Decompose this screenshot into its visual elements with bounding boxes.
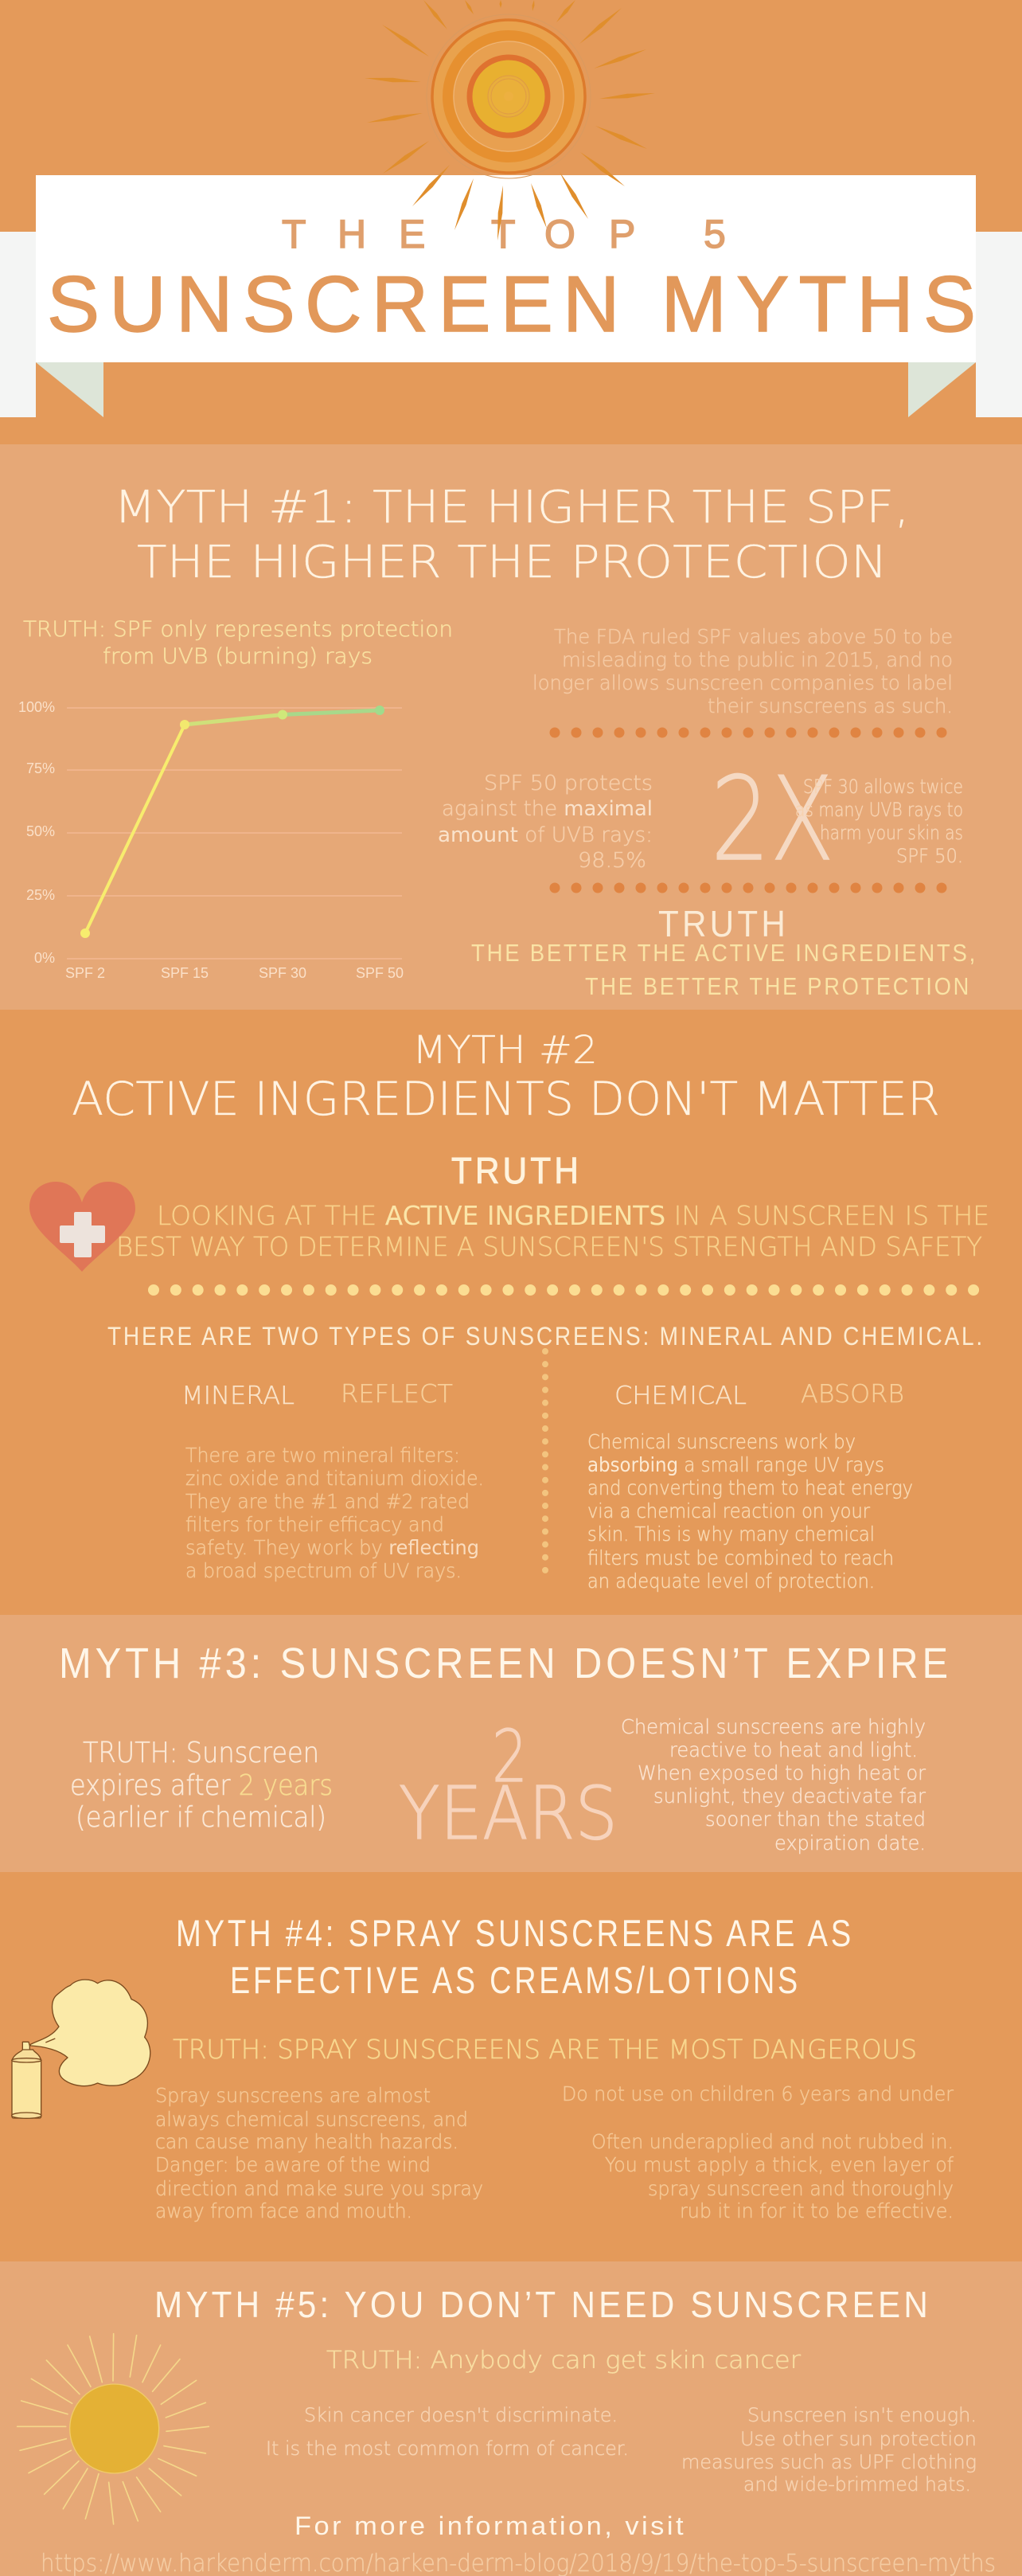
text: mineral column: a broad spectrum of UV rays.	[185, 1559, 462, 1582]
text: sun protection: Sunscreen isn't enough.	[747, 2404, 977, 2426]
heading: myth 3: MYTH #3: SUNSCREEN DOESN’T EXPIRE	[59, 1640, 952, 1687]
line chart: spf protection: SPF 50	[356, 965, 404, 981]
panel: myth 2	[0, 1010, 1022, 1615]
text: skin cancer facts	[266, 2404, 629, 2460]
line chart: spf protection: 75%	[26, 760, 55, 776]
text: spray usage: You must apply a thick, even layer of	[605, 2153, 954, 2176]
text: active ingredients truth: LOOKING AT THE ACTIVE INGREDIENTS IN A SUNSCREEN IS THE	[157, 1200, 989, 1231]
text: spf 30 fact: harm your skin as	[820, 822, 963, 844]
text: chemical column: ABSORB	[801, 1380, 904, 1409]
text: spf 50 fact: amount of UVB rays:	[438, 823, 653, 847]
heading: myth 4	[176, 1912, 854, 2001]
text: better ingredients: THE BETTER THE PROTECTION	[585, 972, 971, 1000]
text: chemical column: filters must be combined to reach	[587, 1546, 894, 1569]
heading: myth 4: MYTH #4: SPRAY SUNSCREENS ARE AS	[176, 1912, 854, 1954]
line chart: spf protection: 100%	[18, 699, 55, 715]
text: spf 30 fact	[795, 776, 963, 867]
line chart: spf protection: 25%	[26, 887, 55, 903]
text: spray hazards: away from face and mouth.	[155, 2199, 412, 2222]
text: sun protection: Use other sun protection	[740, 2428, 977, 2450]
icon: heart with cross	[29, 1182, 135, 1272]
text: truth about skin cancer: TRUTH: Anybody can get skin cancer	[326, 2347, 802, 2375]
text: skin cancer facts: Skin cancer doesn't discriminate.	[304, 2404, 618, 2426]
ribbon: white banner	[36, 175, 976, 362]
stat: 2 years: YEARS	[399, 1771, 618, 1856]
panel: myth 3	[0, 1615, 1022, 1872]
text: chemical column: absorbing a small range UV rays	[587, 1453, 884, 1476]
text: mineral column: filters for their efficacy and	[185, 1513, 444, 1536]
text: spray hazards: Danger: be aware of the wind	[155, 2153, 431, 2176]
text: spray usage: spray sunscreen and thoroughly	[648, 2177, 954, 2200]
line chart: spf protection: SPF 15	[161, 965, 209, 981]
text: fda ruling: misleading to the public in 2015, and no	[562, 648, 953, 671]
text: spray hazards: Spray sunscreens are almost	[155, 2084, 431, 2107]
text: skin cancer facts: It is the most common form of cancer.	[266, 2437, 629, 2460]
text: more information: For more information, visit	[295, 2512, 686, 2540]
text: sun protection: measures such as UPF clothing	[681, 2451, 977, 2473]
text: spf 50 fact: against the maximal	[442, 797, 653, 821]
text: sun protection: and wide-brimmed hats.	[743, 2473, 971, 2496]
panel: myth 5	[0, 2261, 1022, 2576]
text: spray hazards: always chemical sunscreens, and	[155, 2108, 468, 2131]
text: fda ruling: longer allows sunscreen companies to label	[532, 671, 953, 694]
text: chemical column: Chemical sunscreens work by	[587, 1430, 856, 1453]
heading: myth 1: MYTH #1: THE HIGHER THE SPF,	[114, 482, 910, 534]
stat: 2x: 2X	[711, 752, 834, 887]
text: chemical column: via a chemical reaction on your	[587, 1499, 871, 1523]
text: chemical column: skin. This is why many chemical	[587, 1523, 875, 1546]
text: truth about sprays: TRUTH: SPRAY SUNSCREENS ARE THE MOST DANGEROUS	[173, 2034, 917, 2065]
text: active ingredients truth: BEST WAY TO DETERMINE A SUNSCREEN'S STRENGTH AND SAFETY	[116, 1231, 982, 1262]
text: truth about expiry	[70, 1737, 333, 1834]
text: chemical expiry: expiration date.	[774, 1831, 926, 1855]
text: chemical expiry: reactive to heat and light.	[669, 1738, 918, 1761]
title: sunscreen myths: SUNSCREEN MYTHS	[47, 260, 976, 348]
heading: myth 1: THE HIGHER THE PROTECTION	[137, 537, 887, 588]
panel: header	[0, 0, 1022, 444]
text: active ingredients truth	[116, 1200, 989, 1262]
heading: myth 2: MYTH #2	[412, 1028, 598, 1073]
text: mineral column: REFLECT	[341, 1380, 453, 1409]
text: chemical column: an adequate level of protection.	[587, 1569, 875, 1593]
heading: myth 4: EFFECTIVE AS CREAMS/LOTIONS	[230, 1959, 801, 2001]
text: chemical expiry: sooner than the stated	[705, 1808, 926, 1831]
text: spray hazards: can cause many health hazards.	[155, 2130, 458, 2153]
text: truth label: TRUTH	[658, 903, 789, 944]
text: spf 50 fact: 98.5%	[578, 849, 646, 873]
text: better ingredients	[471, 939, 977, 1000]
text: spf 50 fact	[438, 772, 653, 873]
text: chemical expiry: When exposed to high heat or	[638, 1761, 926, 1784]
text: sun protection	[681, 2404, 977, 2496]
line chart: spf protection: 0%	[34, 950, 55, 966]
text: truth about spf: TRUTH: SPF only represents protection	[23, 617, 453, 642]
line chart: spf protection: SPF 2	[65, 965, 105, 981]
text: mineral column: There are two mineral filters:	[185, 1444, 460, 1467]
text: truth about expiry: (earlier if chemical)	[76, 1801, 326, 1834]
text: spray usage: rub it in for it to be effective.	[680, 2199, 954, 2222]
text: mineral column	[181, 1380, 484, 1582]
text: chemical column: CHEMICAL	[614, 1382, 747, 1410]
text: chemical expiry: sunlight, they deactivate far	[653, 1784, 926, 1808]
heading: myth 1	[114, 482, 910, 588]
heading: myth 2	[72, 1028, 940, 1126]
text: spray usage: Often underapplied and not rubbed in.	[591, 2130, 954, 2153]
text: fda ruling: their sunscreens as such.	[708, 694, 953, 717]
text: mineral column: They are the #1 and #2 rated	[185, 1490, 470, 1513]
text: spf 50 fact: SPF 50 protects	[484, 772, 653, 795]
text: chemical expiry	[621, 1715, 926, 1855]
text: truth about expiry: expires after 2 years	[70, 1769, 333, 1802]
text: spray usage: Do not use on children 6 years and under	[562, 2082, 954, 2105]
line chart: spf protection: SPF 30	[259, 965, 306, 981]
icon: spray can	[12, 1980, 150, 2118]
text: truth about spf: from UVB (burning) rays	[103, 644, 373, 669]
text: mineral column: safety. They work by reflecting	[185, 1536, 479, 1559]
text: mineral column: zinc oxide and titanium dioxide.	[185, 1467, 484, 1490]
title: the top 5: THE TOP 5	[282, 212, 726, 256]
icon: header sun	[365, 0, 655, 240]
text: chemical column	[587, 1380, 913, 1593]
icon: yellow sun	[18, 2334, 209, 2524]
text: mineral column: MINERAL	[181, 1382, 295, 1410]
panel: myth 4	[0, 1872, 1022, 2261]
text: truth label: TRUTH	[451, 1150, 582, 1191]
stat: 2 years: 2	[492, 1715, 528, 1799]
text: spray hazards	[155, 2084, 483, 2222]
heading: myth 2: ACTIVE INGREDIENTS DON'T MATTER	[72, 1072, 940, 1126]
stat: 2 years	[399, 1715, 618, 1856]
text: spf 30 fact: SPF 30 allows twice	[803, 776, 963, 798]
text: chemical column: and converting them to heat energy	[587, 1476, 913, 1499]
heading: myth 5: MYTH #5: YOU DON’T NEED SUNSCREEN	[154, 2284, 931, 2325]
text: chemical expiry: Chemical sunscreens are highly	[621, 1715, 926, 1738]
text: truth about spf	[23, 617, 453, 669]
text: spray hazards: direction and make sure you spray	[155, 2177, 483, 2200]
line chart: spf protection: 50%	[26, 823, 55, 839]
line chart: spf protection	[18, 699, 404, 981]
panel: myth 1	[0, 444, 1022, 1010]
text: spray usage	[562, 2082, 954, 2222]
text: fda ruling	[532, 625, 953, 717]
text: spf 30 fact: as many UVB rays to	[795, 799, 963, 821]
text: truth about expiry: TRUTH: Sunscreen	[83, 1737, 319, 1769]
text: spf 30 fact: SPF 50.	[896, 845, 963, 867]
text: fda ruling: The FDA ruled SPF values above 50 to be	[554, 625, 953, 648]
